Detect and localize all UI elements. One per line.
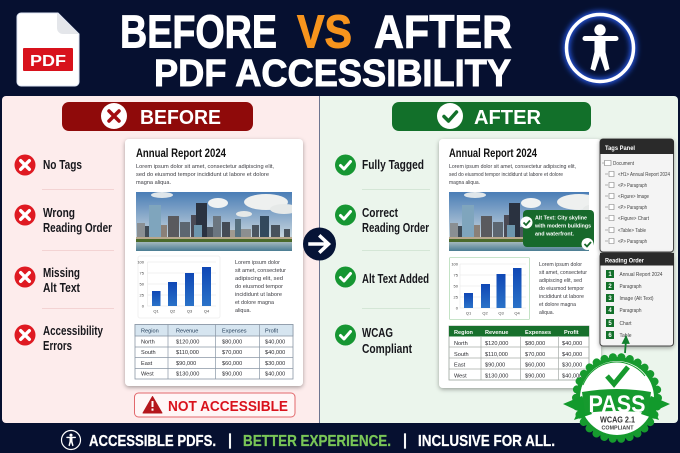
side paragraph: do eiusmod tempor xyxy=(539,286,584,292)
bar chart: 50 xyxy=(140,282,145,286)
data table: $40,000 xyxy=(562,374,582,380)
data table: $30,000 xyxy=(265,361,285,367)
tag tree: <P> Paragraph xyxy=(618,239,647,245)
document: tagged report: magna aliqua. xyxy=(449,180,480,186)
data table: $80,000 xyxy=(222,340,242,346)
data table: South xyxy=(454,352,469,358)
ordered steps: 6 xyxy=(608,333,612,339)
image: city skyline xyxy=(136,192,298,251)
list: fixes: Fully Tagged xyxy=(362,158,424,172)
list: fixes: Alt Text Added xyxy=(362,272,429,286)
document: tagged report: sed do eiusmod tempor incididunt ut labore et dolore xyxy=(449,172,563,178)
data table: Profit xyxy=(265,328,279,334)
document: untagged report: Annual Report 2024 xyxy=(136,146,226,160)
data table: $40,000 xyxy=(265,340,285,346)
list: problems: Errors xyxy=(43,339,72,353)
arrow: before to after xyxy=(303,228,336,260)
callout: alt text: with modern buildings xyxy=(534,224,591,230)
icon: PDF file xyxy=(17,13,79,86)
bar chart xyxy=(450,258,530,320)
bar chart: Q2 xyxy=(170,308,176,314)
bar chart: 50 xyxy=(454,284,459,288)
data table: $90,000 xyxy=(222,372,242,378)
side paragraph: do eiusmod tempor xyxy=(235,284,283,290)
bar chart: Q2 xyxy=(482,310,488,316)
side paragraph: sit amet, consectetur xyxy=(539,270,587,276)
badge: PASS WCAG 2.1 compliant: WCAG 2.1 xyxy=(600,416,635,424)
callout: alt text xyxy=(520,210,594,250)
panel: reading order xyxy=(600,253,674,346)
side paragraph: incididunt ut labore xyxy=(539,294,584,300)
data table xyxy=(449,326,589,380)
list: fixes: Correct xyxy=(362,206,399,220)
ordered steps: Table xyxy=(620,333,632,339)
bar chart: 25 xyxy=(140,292,145,298)
data table: $130,000 xyxy=(176,372,199,378)
bottom tagline: INCLUSIVE FOR ALL. xyxy=(418,433,555,450)
icon: PDF file: PDF xyxy=(30,53,66,70)
bar chart: 100 xyxy=(451,262,459,266)
badge: PASS WCAG 2.1 compliant xyxy=(563,357,670,439)
after header: AFTER xyxy=(474,107,542,129)
list: problems: Wrong xyxy=(43,206,75,220)
list: fixes: WCAG xyxy=(362,326,393,340)
list: problems: No Tags xyxy=(43,158,82,172)
tag tree: <P> Paragraph xyxy=(618,205,647,211)
list: problems xyxy=(14,154,114,353)
data table: $130,000 xyxy=(485,374,508,380)
side paragraph: Lorem ipsum dolor xyxy=(539,262,582,268)
list: problems: Alt Text xyxy=(43,281,81,295)
data table: East xyxy=(141,361,153,367)
bar chart: Q3 xyxy=(498,310,504,316)
data table: Expenses xyxy=(222,328,247,334)
side paragraph: et dolore magna xyxy=(539,302,577,308)
document: tagged report xyxy=(439,139,611,388)
ordered steps: 4 xyxy=(608,308,612,314)
ordered steps: 2 xyxy=(608,284,612,290)
data table: $90,000 xyxy=(176,361,196,367)
data table: West xyxy=(454,374,467,380)
data table: $120,000 xyxy=(485,341,508,347)
badge: PASS WCAG 2.1 compliant: COMPLIANT xyxy=(602,426,634,432)
panel: tags xyxy=(600,139,674,252)
bar chart: 0 xyxy=(456,306,459,310)
document: untagged report xyxy=(125,139,303,386)
side paragraph xyxy=(235,260,286,314)
panel: tags: Tags Panel xyxy=(605,145,635,152)
data table: $80,000 xyxy=(525,341,545,347)
icon: accessibility xyxy=(566,14,634,82)
bottom tagline: BETTER EXPERIENCE. xyxy=(243,433,391,450)
data table: $110,000 xyxy=(485,352,508,358)
data table: $110,000 xyxy=(176,350,199,356)
list: problems: Accessibility xyxy=(43,324,103,338)
document: tagged report: Lorem ipsum dolor sit amet, consectetur adipiscing elit, xyxy=(449,164,576,170)
data table: $60,000 xyxy=(525,362,545,368)
data table: $40,000 xyxy=(265,350,285,356)
bottom tagline: | xyxy=(228,432,232,449)
document: tagged report: Annual Report 2024 xyxy=(449,146,537,160)
data table: $120,000 xyxy=(176,340,199,346)
bar chart: 75 xyxy=(454,272,459,278)
icon: accessibility small xyxy=(62,430,80,450)
data table: $70,000 xyxy=(222,350,242,356)
bar chart xyxy=(137,256,220,318)
side paragraph: aliqua. xyxy=(235,308,251,314)
ordered steps xyxy=(606,270,663,339)
ordered steps: Paragraph xyxy=(620,284,642,290)
document: untagged report: sed do eiusmod tempor incididunt ut labore et dolore xyxy=(136,172,269,178)
side paragraph: et dolore magna xyxy=(235,300,275,306)
side paragraph: adipiscing elit, sed xyxy=(539,278,582,284)
image: city skyline xyxy=(449,192,589,251)
title: BEFORE xyxy=(120,6,277,58)
data table: Profit xyxy=(564,330,579,336)
bar chart: Q3 xyxy=(187,308,193,314)
tag tree: <Table> Table xyxy=(618,228,646,234)
data table: $40,000 xyxy=(562,352,582,358)
bar chart: 75 xyxy=(140,270,145,276)
title: PDF ACCESSIBILITY xyxy=(154,53,511,95)
document: untagged report: magna aliqua. xyxy=(136,180,171,186)
data table: North xyxy=(141,340,155,346)
ordered steps: Annual Report 2024 xyxy=(620,272,663,278)
side paragraph: aliqua. xyxy=(539,310,554,316)
panel: before xyxy=(2,96,320,423)
bar chart: 100 xyxy=(137,260,145,264)
data table: $40,000 xyxy=(562,341,582,347)
data table xyxy=(135,324,293,379)
bar chart: Q4 xyxy=(204,308,210,314)
callout: alt text: Alt Text: City skyline xyxy=(535,216,588,222)
bar chart: Q4 xyxy=(514,310,520,316)
callout: alt text: and waterfront. xyxy=(535,232,574,238)
tag tree: <Figure> Image xyxy=(618,194,649,200)
list: fixes xyxy=(335,154,430,356)
bottom tagline: | xyxy=(403,432,407,449)
ordered steps: Paragraph xyxy=(620,308,642,314)
data table: $40,000 xyxy=(265,372,285,378)
data table: North xyxy=(454,341,468,347)
ordered steps: Image (Alt Text) xyxy=(620,296,654,302)
bar chart: Q1 xyxy=(153,308,159,314)
list: problems: Missing xyxy=(43,266,80,280)
before header: BEFORE xyxy=(140,107,221,129)
not accessible label: NOT ACCESSIBLE xyxy=(168,399,288,415)
ribbon: PASS xyxy=(588,391,646,418)
title: VS xyxy=(297,6,352,58)
ordered steps: 3 xyxy=(608,296,612,302)
bottom tagline: ACCESSIBLE PDFS. xyxy=(89,433,216,450)
side paragraph: adipiscing elit, sed xyxy=(235,276,283,282)
data table: Expenses xyxy=(525,330,551,336)
before header xyxy=(62,102,253,131)
ordered steps: 5 xyxy=(608,321,612,327)
ordered steps: Chart xyxy=(620,321,632,327)
ordered steps: 1 xyxy=(608,272,612,278)
title: AFTER xyxy=(374,6,512,58)
title xyxy=(120,6,512,95)
side paragraph xyxy=(539,262,587,316)
bar chart: Q1 xyxy=(466,310,472,316)
bar chart: 25 xyxy=(454,294,459,300)
after header xyxy=(392,102,591,131)
data table: $60,000 xyxy=(222,361,242,367)
side paragraph: Lorem ipsum dolor xyxy=(235,260,280,266)
data table: West xyxy=(141,372,154,378)
data table: Region xyxy=(141,328,159,334)
not accessible label xyxy=(134,393,295,417)
panel: after xyxy=(320,96,678,423)
side paragraph: sit amet, consectetur xyxy=(235,268,286,274)
side paragraph: incididunt ut labore xyxy=(235,292,282,298)
data table: $90,000 xyxy=(525,374,545,380)
bar chart: 0 xyxy=(142,304,145,308)
tag tree: <P> Paragraph xyxy=(618,183,647,189)
tag tree: <Figure> Chart xyxy=(618,216,650,222)
document: untagged report: Lorem ipsum dolor sit amet, consectetur adipiscing elit, xyxy=(136,164,274,170)
list: fixes: Compliant xyxy=(362,342,413,356)
tag tree xyxy=(602,160,670,245)
data table: $90,000 xyxy=(485,362,505,368)
data table: South xyxy=(141,350,156,356)
data table: $30,000 xyxy=(562,362,582,368)
list: fixes: Reading Order xyxy=(362,221,429,235)
data table: Revenue xyxy=(485,330,508,336)
data table: Region xyxy=(454,330,474,336)
bottom tagline xyxy=(62,430,555,450)
panel: reading order: Reading Order xyxy=(605,258,644,264)
tag tree: Document xyxy=(613,161,635,167)
data table: $70,000 xyxy=(525,352,545,358)
list: problems: Reading Order xyxy=(43,221,112,235)
tag tree: <H1> Annual Report 2024 xyxy=(618,172,670,178)
data table: East xyxy=(454,362,466,368)
data table: Revenue xyxy=(176,328,198,334)
arrow: to badge xyxy=(623,337,628,353)
